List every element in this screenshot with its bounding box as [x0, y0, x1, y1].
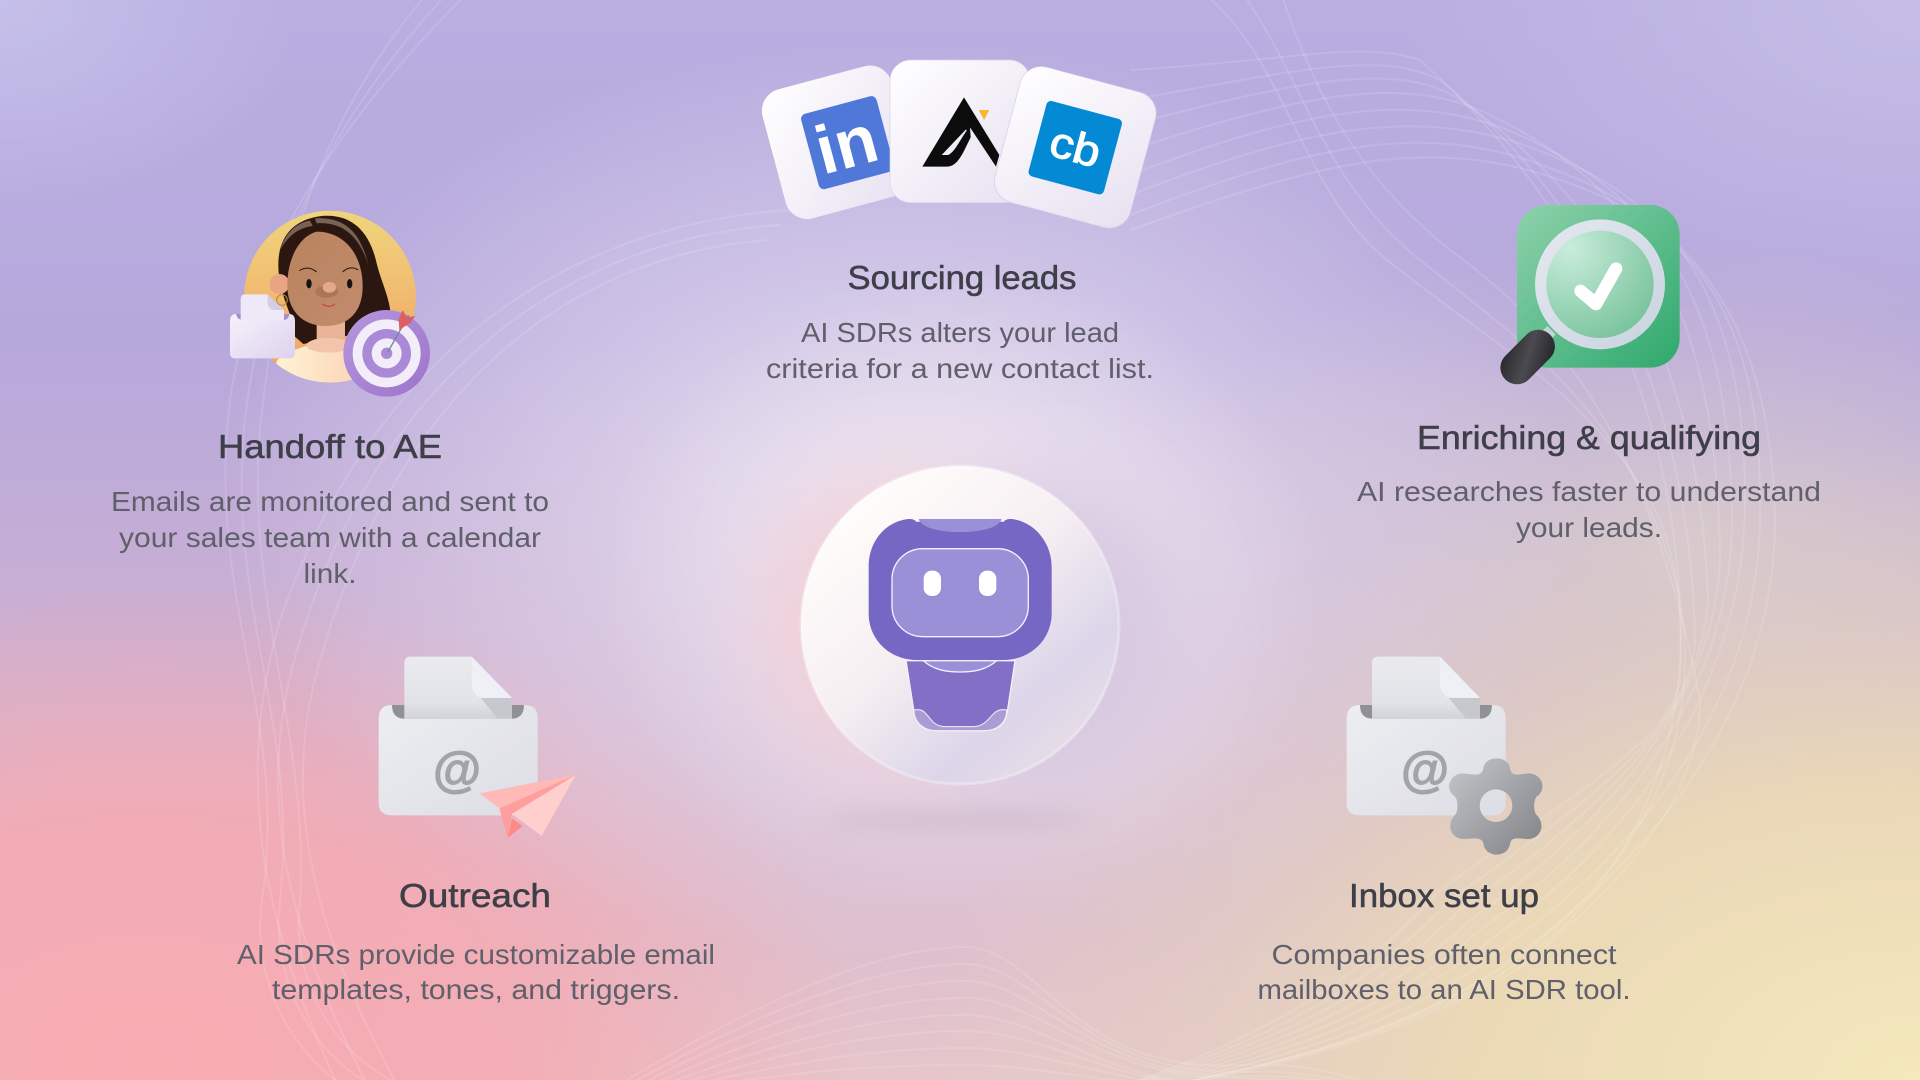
robot head: [869, 519, 1052, 660]
target: [343, 310, 430, 397]
description: your sales team with a calendar: [119, 522, 541, 553]
robot eyes: [924, 571, 996, 596]
description: your leads.: [1516, 512, 1662, 543]
description: criteria for a new contact list.: [766, 353, 1154, 384]
robot body: [906, 661, 1015, 731]
step: inbox set up: [1258, 657, 1630, 1005]
description: AI researches faster to understand: [1357, 476, 1821, 507]
heading: Outreach: [399, 877, 551, 914]
icon: LinkedIn card: [757, 61, 920, 224]
heading: Enriching & qualifying: [1417, 419, 1761, 456]
description: [111, 486, 549, 589]
icon: mail folder with gear: @: [1401, 742, 1449, 797]
icon: mail folder with paper plane: [379, 657, 576, 838]
description: [766, 317, 1154, 384]
icon: Crunchbase card: [990, 62, 1161, 233]
heading: Inbox set up: [1349, 877, 1539, 914]
step: handoff to AE: [111, 211, 549, 589]
icon: avatar with folder and target: [230, 211, 430, 397]
ground shadow: [825, 812, 1095, 828]
robot: [869, 519, 1052, 731]
description: Companies often connect: [1272, 939, 1617, 970]
description: AI SDRs provide customizable email: [237, 939, 715, 970]
icon: Crunchbase card: cb: [1045, 118, 1106, 177]
description: link.: [304, 558, 356, 589]
description: [237, 939, 715, 1005]
icon: mail folder with gear: [1347, 657, 1542, 855]
step: enriching and qualifying: [1357, 205, 1821, 543]
description: AI SDRs alters your lead: [801, 317, 1119, 348]
avatar portrait: [244, 211, 416, 390]
step: outreach: [237, 657, 715, 1005]
heading: Handoff to AE: [218, 428, 442, 465]
robot face: [892, 549, 1028, 637]
description: [1258, 939, 1630, 1005]
icon: LinkedIn card: in: [807, 100, 886, 189]
heading: Sourcing leads: [848, 259, 1076, 296]
description: Emails are monitored and sent to: [111, 486, 549, 517]
description: [1357, 476, 1821, 543]
icon: magnifier over green tile: [1493, 205, 1680, 391]
description: mailboxes to an AI SDR tool.: [1258, 974, 1630, 1005]
description: templates, tones, and triggers.: [272, 974, 680, 1005]
central robot emblem: [755, 466, 1180, 828]
glass orb: [801, 466, 1119, 784]
folder: [230, 294, 295, 358]
icon: Apollo card: [890, 60, 1030, 203]
glow behind orb: [755, 470, 1180, 780]
icon: mail folder with paper plane: @: [433, 742, 481, 797]
logo cards: [757, 60, 1161, 233]
antenna cap: [919, 519, 1002, 532]
step: sourcing leads: [757, 60, 1161, 384]
